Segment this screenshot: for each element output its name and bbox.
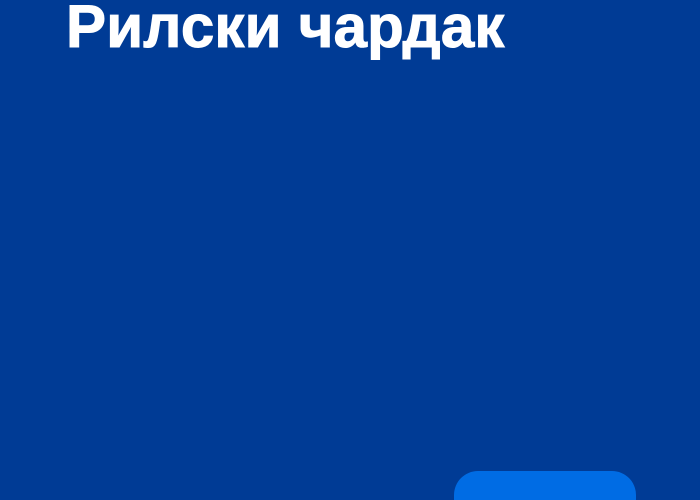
button [454,471,636,500]
